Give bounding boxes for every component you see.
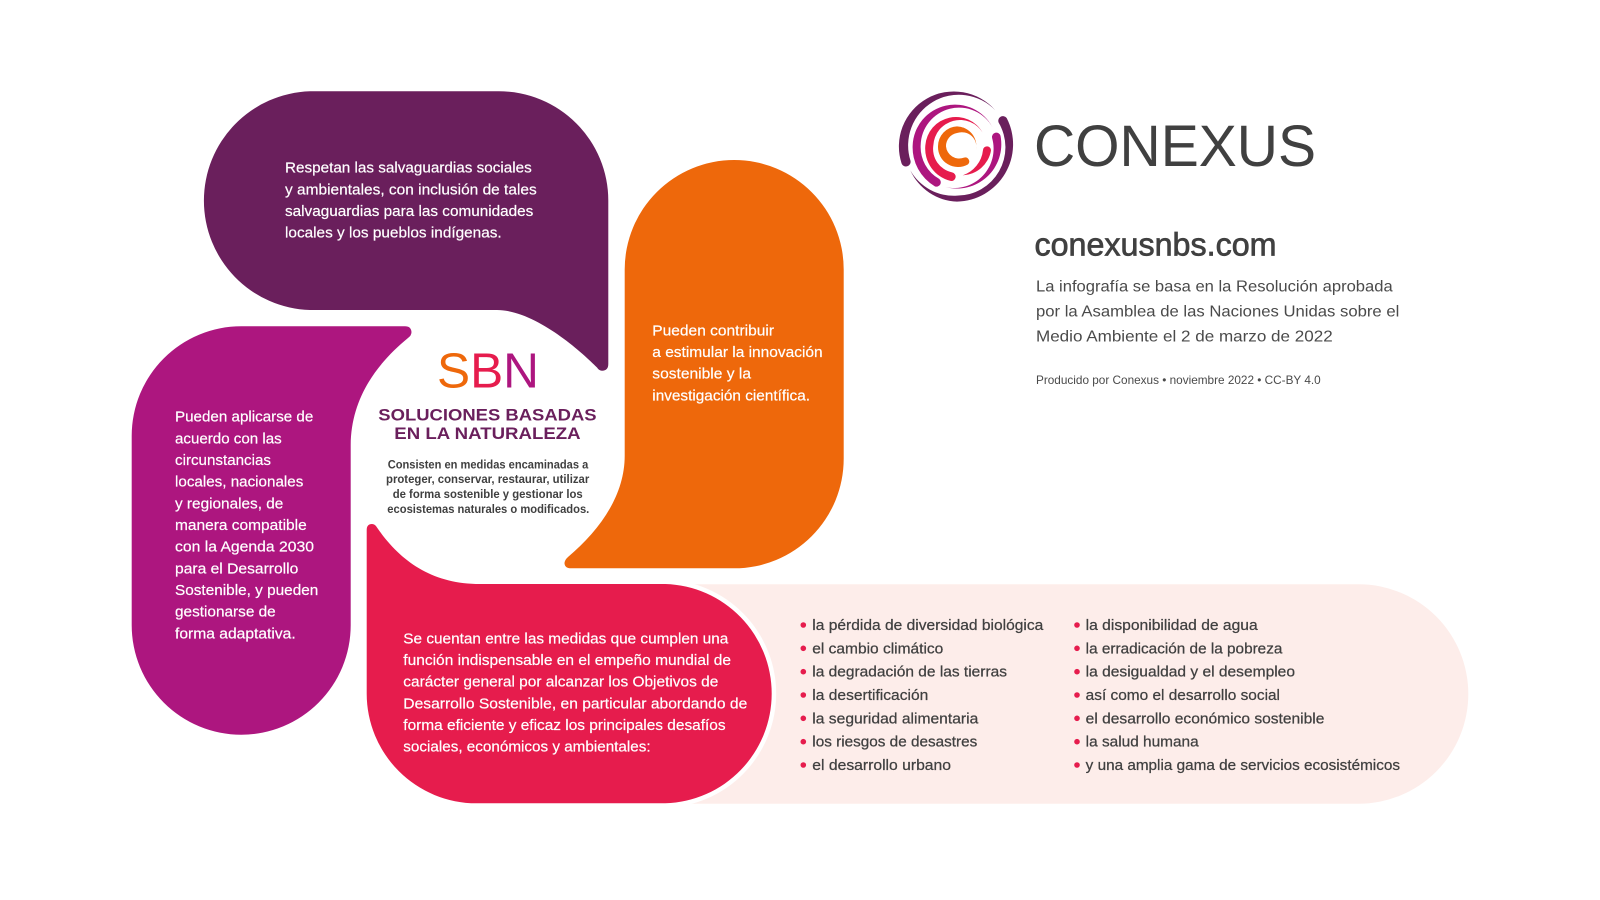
icon: conexus logo [899,91,1013,202]
text: pueden aplicarse [175,409,318,642]
text: respetan: salvaguardias para las comunidades [285,203,533,220]
list: desafíos columna 2: la salud humana [1086,734,1199,751]
text: se cuentan [403,630,747,756]
list: desafíos columna 1: el cambio climático [812,640,943,657]
heading: conexusnbs.com: conexusnbs.com [1034,226,1276,262]
list: desafíos columna 1: la degradación de las tierras [812,664,1007,681]
list: desafíos columna 1: la seguridad alimentaria [812,710,979,727]
text: se cuentan: forma eficiente y eficaz los principales desafíos [403,717,726,734]
list: desafíos columna 1: la pérdida de diversidad biológica [812,617,1044,634]
list: desafíos columna 2: la disponibilidad de agua [1086,617,1258,634]
text: pueden aplicarse: para el Desarrollo [175,560,298,577]
heading: soluciones basadas en la naturaleza: SOLUCIONES BASADAS [378,406,597,425]
text: respetan: locales y los pueblos indígenas. [285,225,502,242]
text: descripción de la infografía: por la Asamblea de las Naciones Unidas sobre el [1036,304,1399,321]
text: descripción de la infografía: La infografía se basa en la Resolución aprobada [1036,279,1393,296]
text: definición: de forma sostenible y gestionar los [393,489,583,501]
text: respetan [285,160,537,242]
panel: innovación [564,160,844,568]
text: pueden aplicarse: acuerdo con las [175,430,282,447]
text: definición [386,459,590,516]
text: se cuentan: carácter general por alcanzar los Objetivos de [403,674,718,691]
text: créditos: Producido por Conexus • noviembre 2022 • CC-BY 4.0 [1036,373,1321,387]
text: definición: proteger, conservar, restaurar, utilizar [386,474,590,486]
text: se cuentan: Desarrollo Sostenible, en particular abordando de [403,695,747,712]
list: desafíos columna 2: y una amplia gama de servicios ecosistémicos [1086,757,1400,774]
heading: CONEXUS wordmark: CONEXUS [1034,114,1316,179]
panel: lista de desafíos [670,584,1468,804]
text: descripción de la infografía: Medio Ambiente el 2 de marzo de 2022 [1036,329,1333,346]
list: desafíos columna 2: el desarrollo económico sostenible [1086,710,1324,727]
text: pueden aplicarse: con la Agenda 2030 [175,539,314,556]
text: pueden aplicarse: circunstancias [175,452,271,469]
text: pueden contribuir [652,322,823,404]
list: desafíos columna 2: la erradicación de la pobreza [1086,640,1283,657]
text: pueden contribuir: Pueden contribuir [652,322,774,339]
list: desafíos columna 1: los riesgos de desastres [812,734,977,751]
text: pueden aplicarse: Pueden aplicarse de [175,409,313,426]
list: desafíos columna 2 [1074,617,1400,774]
text: pueden aplicarse: gestionarse de [175,604,276,621]
center: SBN heading block [378,345,597,516]
heading: soluciones basadas en la naturaleza: EN LA NATURALEZA [394,424,581,443]
text: pueden contribuir: investigación científica. [652,387,810,404]
panel: aplicarse [132,326,411,735]
list: desafíos columna 1 [800,617,1044,774]
panel: objetivos de desarrollo [367,524,772,803]
panel: respetan salvaguardias [204,91,608,371]
text: pueden contribuir: a estimular la innovación [652,344,823,361]
list: desafíos columna 2: la desigualdad y el desempleo [1086,664,1295,681]
text: se cuentan: sociales, económicos y ambientales: [403,739,651,756]
text: pueden contribuir: sostenible y la [652,366,752,383]
list: desafíos columna 2: así como el desarrollo social [1086,687,1280,704]
list: desafíos columna 1: la desertificación [812,687,928,704]
text: pueden aplicarse: y regionales, de [175,495,283,512]
list: desafíos columna 1: el desarrollo urbano [812,757,951,774]
heading: SBN: SBN [437,345,539,399]
text: se cuentan: Se cuentan entre las medidas que cumplen una [403,630,729,647]
text: respetan: y ambientales, con inclusión de tales [285,181,537,198]
text: descripción de la infografía [1036,279,1399,346]
text: se cuentan: función indispensable en el empeño mundial de [403,652,731,669]
text: definición: Consisten en medidas encaminadas a [388,459,589,471]
text: pueden aplicarse: locales, nacionales [175,474,303,491]
text: pueden aplicarse: manera compatible [175,517,307,534]
text: pueden aplicarse: forma adaptativa. [175,625,296,642]
heading: soluciones basadas en la naturaleza [378,406,597,443]
text: pueden aplicarse: Sostenible, y pueden [175,582,318,599]
text: respetan: Respetan las salvaguardias sociales [285,160,532,177]
text: definición: ecosistemas naturales o modificados. [387,504,589,516]
